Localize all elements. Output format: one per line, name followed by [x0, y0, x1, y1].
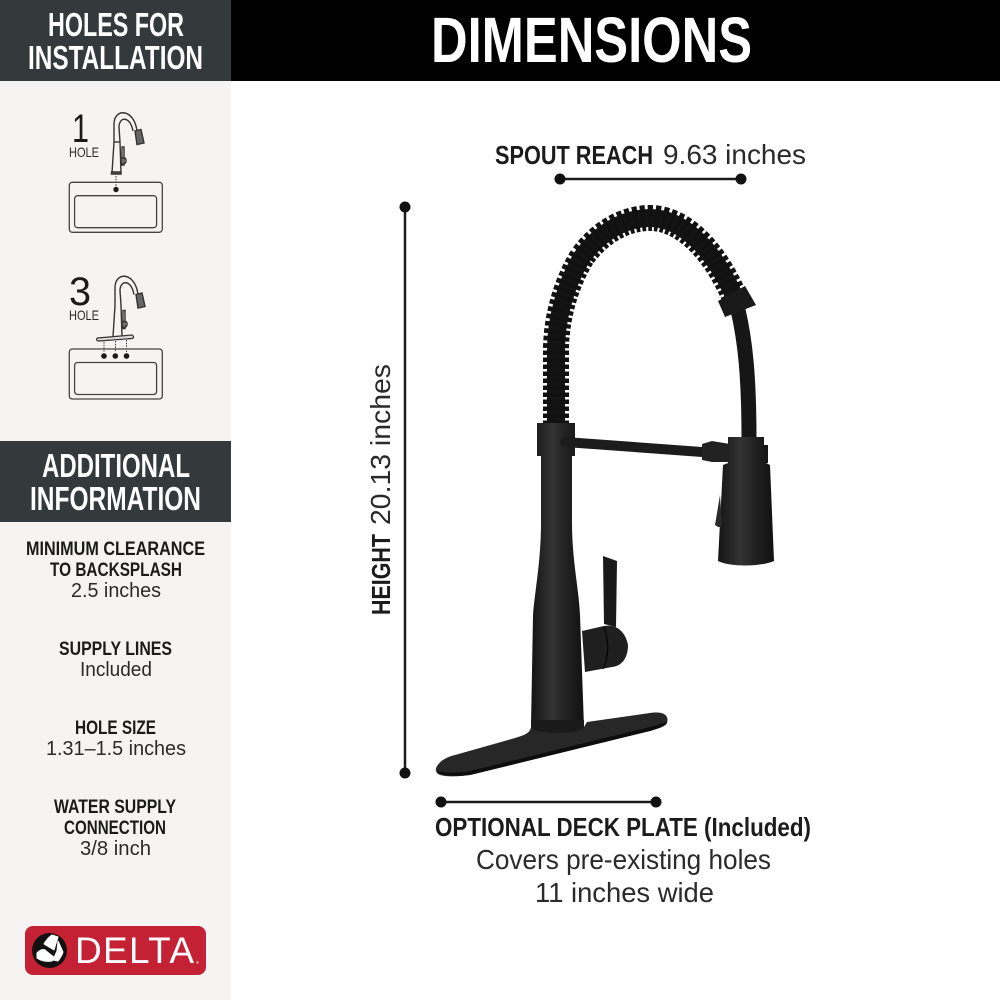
arrow: deck plate dimension line	[436, 796, 662, 808]
arrow: height dimension line	[400, 202, 410, 778]
text block: supply lines	[59, 639, 172, 681]
handle	[603, 556, 617, 627]
logo: delta	[25, 926, 206, 975]
text block: water supply connection: CONNECTION	[64, 818, 166, 839]
logo: delta: ®	[196, 960, 199, 965]
panel: holes for installation header: HOLES FOR	[48, 6, 184, 43]
text block: water supply connection	[54, 797, 176, 860]
text block: hole size: 1.31–1.5 inches	[46, 738, 186, 760]
coil spring	[556, 218, 735, 425]
spout reach label: SPOUT REACH	[495, 140, 653, 170]
deck plate label: Covers pre-existing holes	[476, 844, 771, 875]
text block: water supply connection: WATER SUPPLY	[54, 797, 176, 818]
spray head	[718, 437, 774, 566]
sidebar panel	[0, 0, 231, 1000]
text block: minimum clearance: 2.5 inches	[71, 580, 161, 602]
column	[531, 423, 584, 732]
text block: minimum clearance: MINIMUM CLEARANCE	[26, 539, 205, 560]
hose	[738, 310, 749, 440]
text block: supply lines: Included	[80, 659, 152, 681]
icon: 3 hole installation	[69, 270, 162, 399]
icon: 1 hole installation: 1	[72, 107, 89, 151]
panel: holes for installation header: INSTALLATION	[28, 39, 203, 76]
deck plate label	[435, 812, 811, 908]
arrow: spout reach dimension line	[554, 174, 746, 184]
panel: additional information header: ADDITIONAL	[42, 447, 190, 484]
faucet illustration	[436, 218, 774, 776]
panel: additional information header: INFORMATION	[30, 480, 201, 517]
icon: 3 hole installation: 3	[69, 270, 91, 314]
height label: 20.13 inches	[365, 364, 396, 525]
icon: 1 hole installation	[69, 107, 162, 232]
icon: 1 hole installation: HOLE	[69, 144, 99, 160]
text block: minimum clearance: TO BACKSPLASH	[50, 560, 182, 581]
logo: delta: DELTA	[75, 930, 194, 971]
height label: HEIGHT	[366, 534, 396, 615]
text block: supply lines: SUPPLY LINES	[59, 639, 172, 660]
height label	[365, 364, 396, 615]
deck plate	[436, 713, 667, 776]
spout reach label	[495, 139, 806, 170]
title: dimensions	[231, 0, 1000, 81]
text block: hole size	[46, 718, 186, 760]
icon: 3 hole installation: HOLE	[69, 307, 99, 323]
text block: minimum clearance	[26, 539, 205, 602]
deck plate label: OPTIONAL DECK PLATE (Included)	[435, 812, 811, 842]
panel: additional information header	[0, 441, 231, 522]
coil collar	[718, 286, 756, 317]
spout reach label: 9.63 inches	[663, 139, 806, 170]
text block: water supply connection: 3/8 inch	[80, 838, 151, 860]
panel: holes for installation header	[0, 0, 231, 81]
deck plate label: 11 inches wide	[535, 877, 714, 908]
pull arm	[565, 437, 702, 457]
text block: hole size: HOLE SIZE	[75, 718, 156, 739]
title: dimensions: DIMENSIONS	[431, 4, 752, 76]
